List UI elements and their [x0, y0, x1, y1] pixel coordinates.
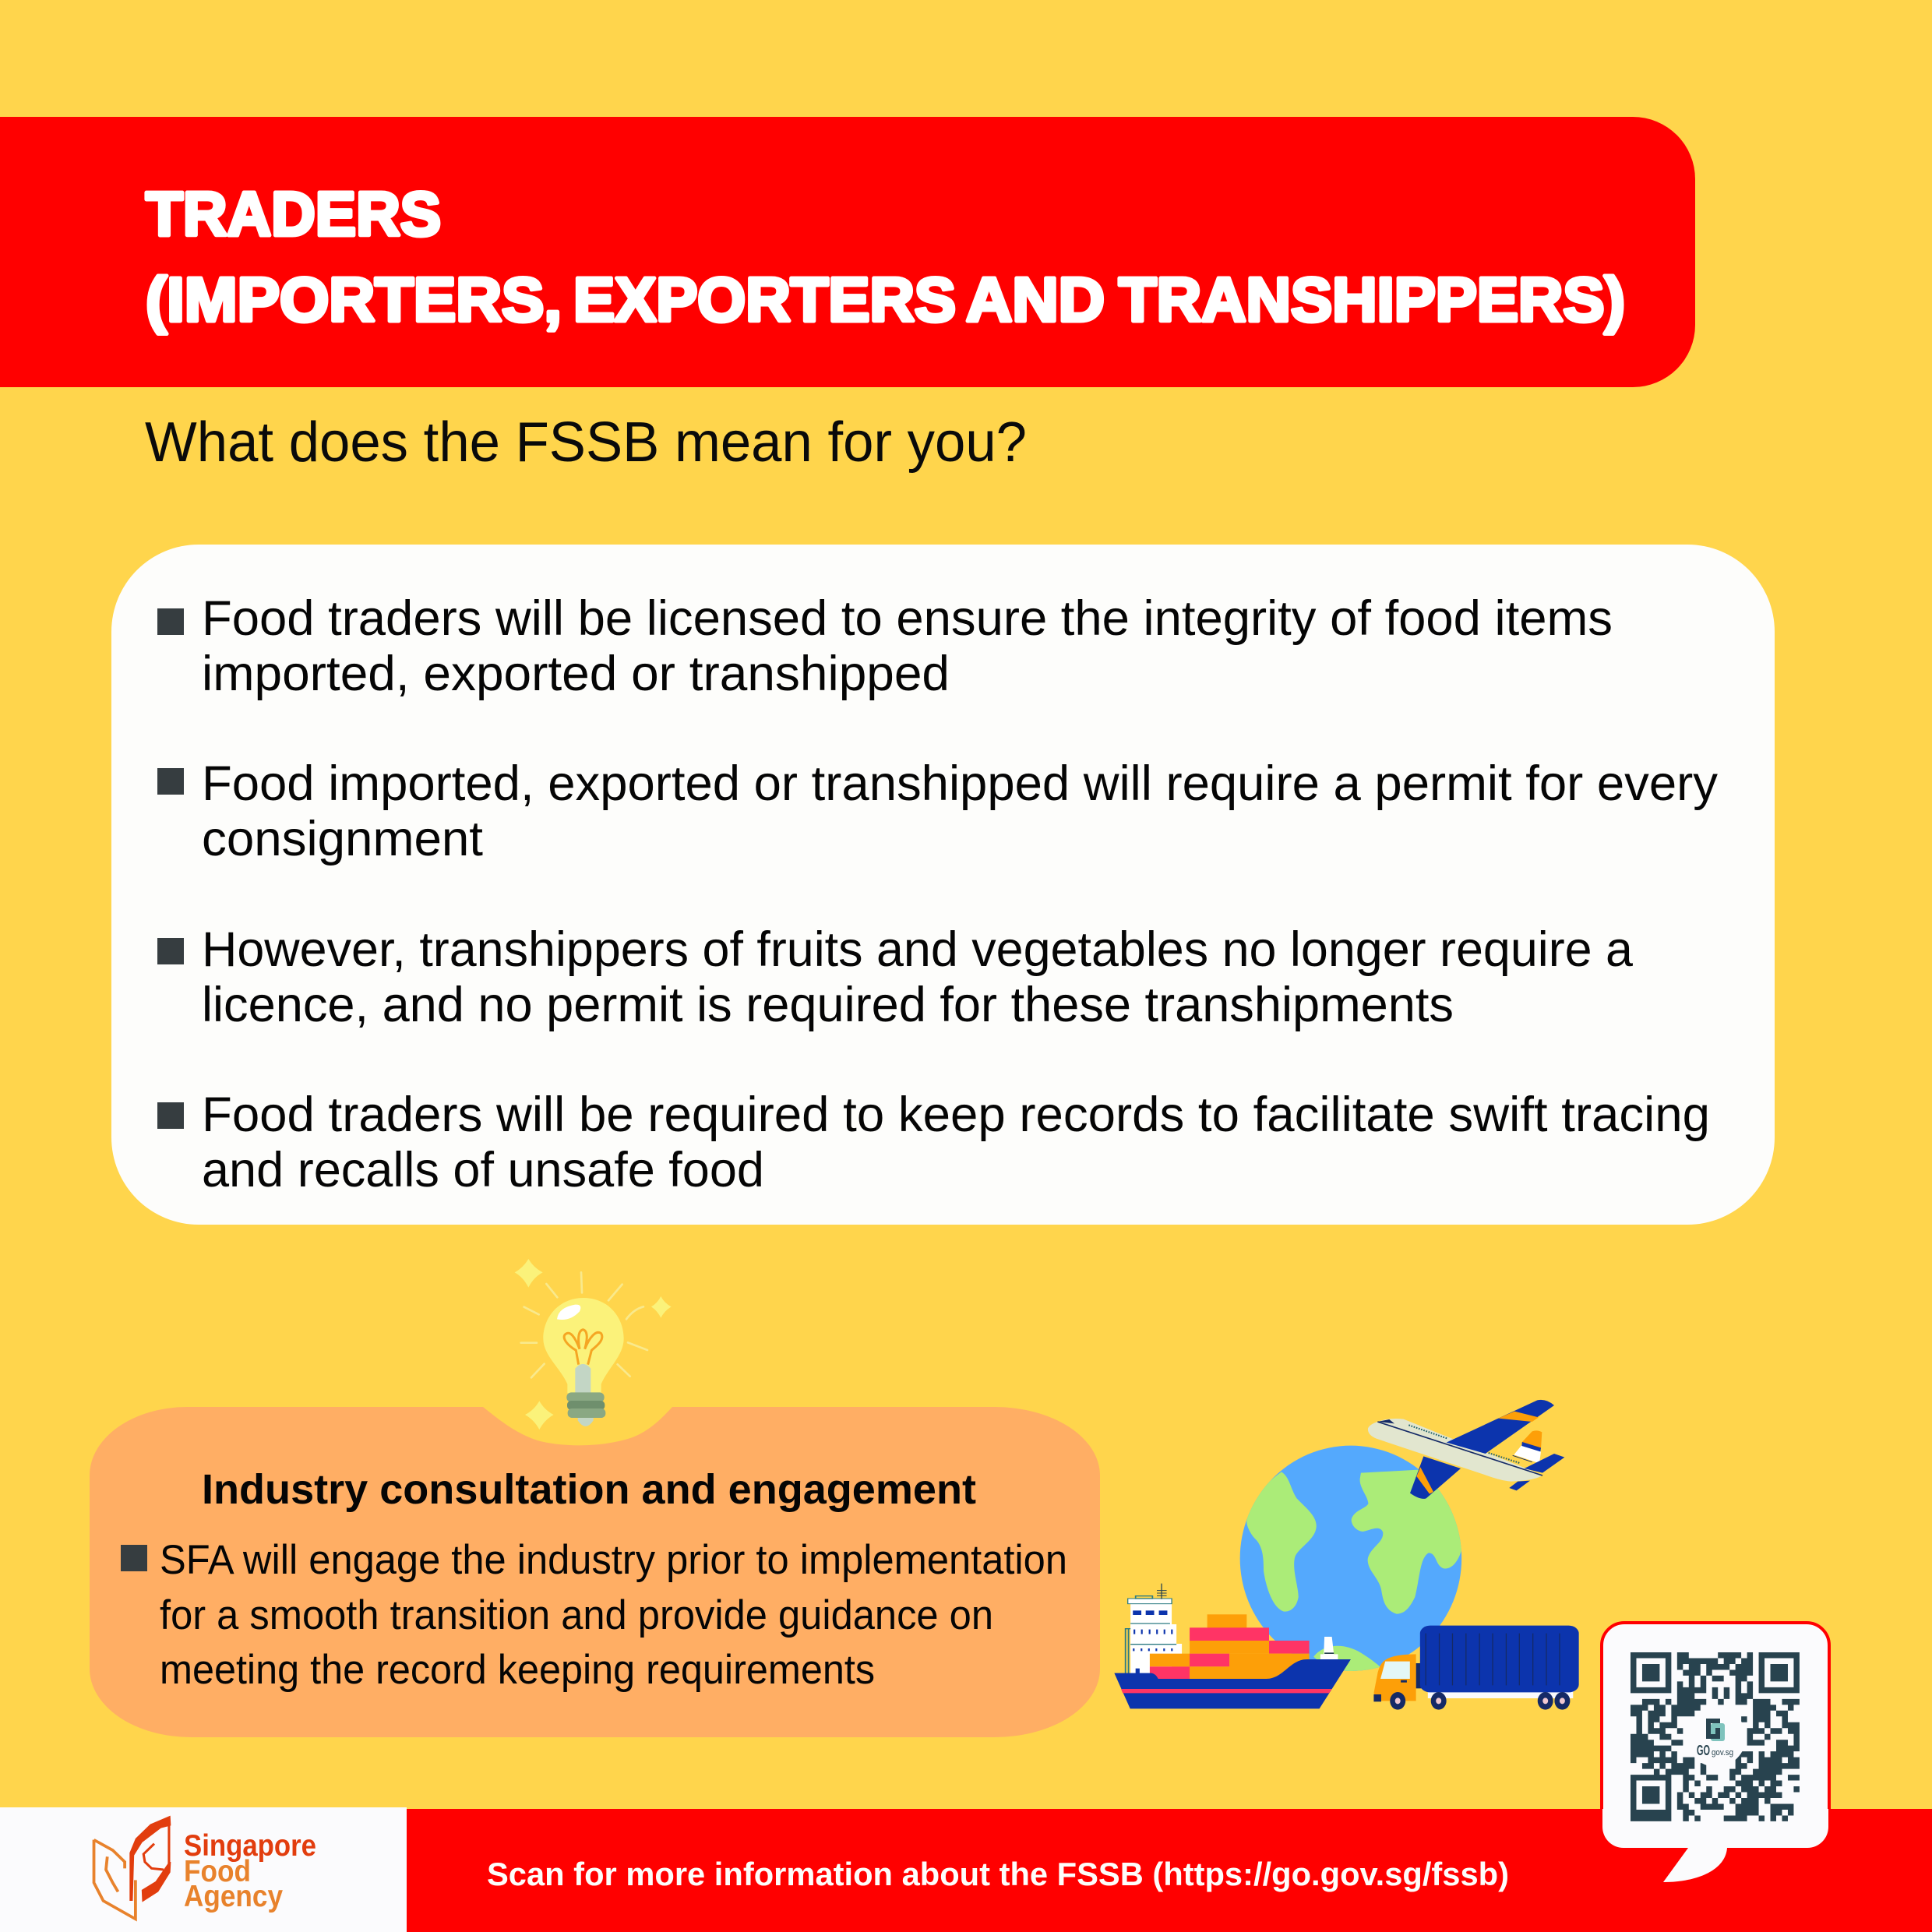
logo text: Singapore: [184, 1829, 316, 1863]
bullet 4: [157, 1088, 1710, 1197]
title: (IMPORTERS,: [146, 265, 562, 334]
subtitle: What does the FSSB mean for you?: [145, 411, 1027, 474]
logo text: Agency: [184, 1880, 283, 1913]
footer text: Scan for more information about the FSSB (https://go.gov.sg/fssb): [487, 1856, 1509, 1892]
panel bullet: for a smooth transition and provide guidance on: [160, 1592, 993, 1638]
bullet 1: [157, 591, 1613, 701]
title: TRANSHIPPERS): [1119, 265, 1625, 334]
bullet 3: However, transhippers of fruits and vegetables no longer require a: [202, 922, 1634, 977]
globe: [1240, 1446, 1462, 1671]
GO logo: GO: [1697, 1743, 1710, 1758]
truck: [1373, 1626, 1579, 1710]
title: AND: [966, 265, 1105, 334]
bullet 4: and recalls of unsafe food: [202, 1143, 764, 1197]
title: TRADERS: [146, 179, 441, 249]
logo text: Food: [184, 1855, 251, 1888]
illustration: plane: [1368, 1400, 1564, 1499]
illustration: globe with ship and truck: [1114, 1446, 1579, 1710]
panel bullet: [121, 1537, 1067, 1693]
logo mark: [94, 1816, 171, 1919]
icon: light bulb: [515, 1259, 672, 1430]
bullet 4: Food traders will be required to keep records to facilitate swift tracing: [202, 1088, 1710, 1142]
title: [146, 179, 1625, 334]
header banner: [0, 117, 1695, 387]
bullet 3: [157, 922, 1634, 1032]
ship: [1114, 1584, 1351, 1708]
bullet 1: Food traders will be licensed to ensure the integrity of food items: [202, 591, 1613, 646]
bullet 2: consignment: [202, 812, 483, 866]
title: EXPORTERS: [573, 265, 956, 334]
GO logo: gov.sg: [1712, 1748, 1733, 1757]
QR code: [1631, 1655, 1800, 1818]
panel: key points: [111, 545, 1775, 1225]
GO logo: [1697, 1719, 1733, 1758]
bullet 1: imported, exported or transhipped: [202, 647, 950, 701]
bullet 3: licence, and no permit is required for these transhipments: [202, 978, 1454, 1032]
footer bar: [0, 1807, 1932, 1932]
bullet 2: [157, 756, 1718, 866]
panel: industry consultation: [90, 1407, 1100, 1737]
logo text: [184, 1829, 316, 1913]
panel bullet: SFA will engage the industry prior to implementation: [160, 1537, 1067, 1583]
bullet 2: Food imported, exported or transhipped will require a permit for every: [202, 756, 1718, 811]
panel bullet: meeting the record keeping requirements: [160, 1647, 875, 1693]
panel heading: Industry consultation and engagement: [202, 1466, 976, 1513]
QR speech bubble: [1602, 1623, 1829, 1882]
logo: Singapore Food Agency: [94, 1816, 316, 1919]
